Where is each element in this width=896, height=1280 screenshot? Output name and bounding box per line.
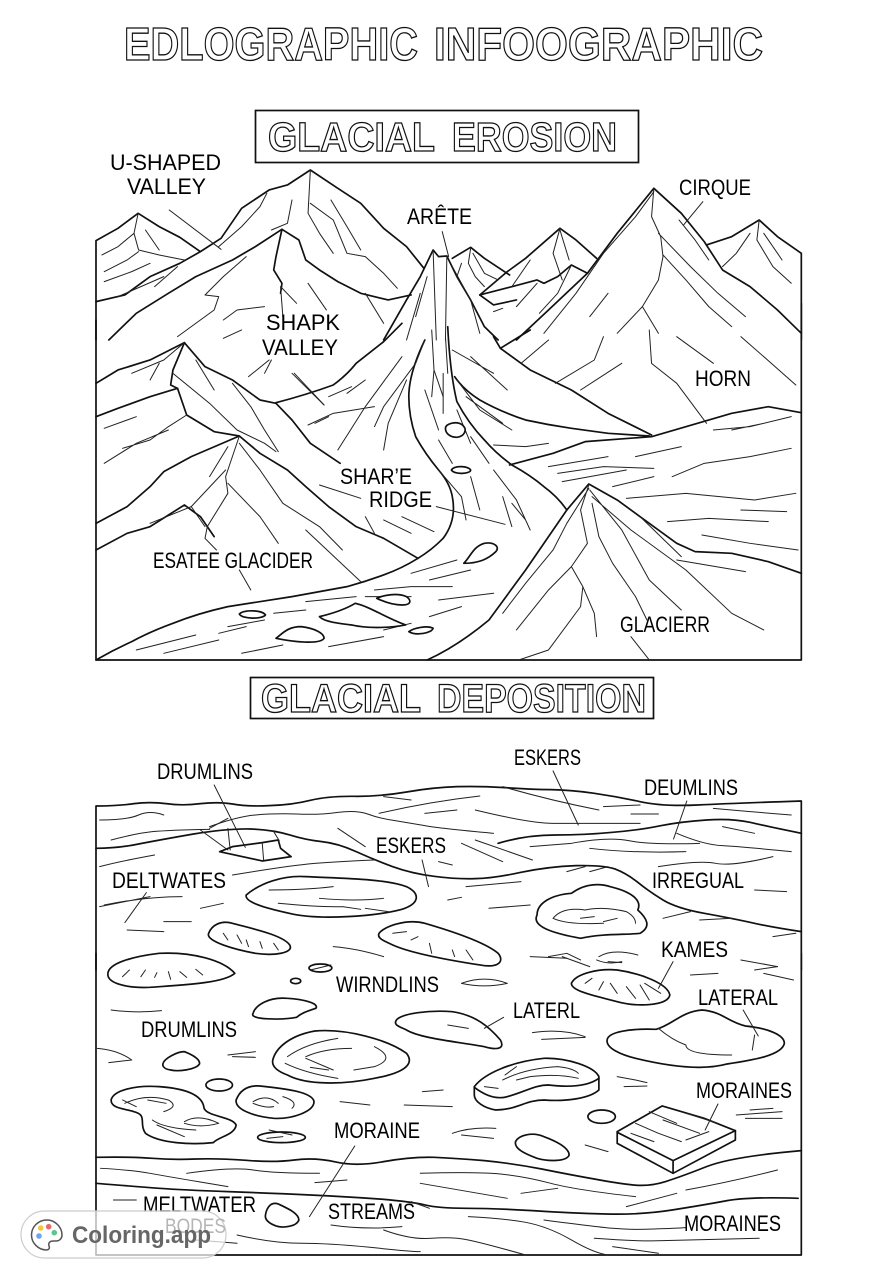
watermark: Coloring.app badge [21,1211,226,1258]
deposition illustration: lower plain and streams [96,953,801,1255]
labels: deposition landforms: DRUMLINS [141,1017,237,1042]
labels: erosion landforms: SHAPK [266,310,340,335]
mountain illustration: glacier valley and foreground [96,303,801,660]
labels: deposition landforms: ESKERS [376,833,446,858]
labels: erosion landforms: HORN [695,366,751,391]
labels: erosion landforms: GLACIERR [620,612,710,637]
labels: deposition landforms: MELTWATER [143,1192,256,1217]
watermark: Coloring.app badge: BODES [165,1215,226,1238]
labels: deposition landforms: MORAINES [684,1211,781,1236]
labels: deposition landforms: MORAINE [334,1118,420,1143]
labels: deposition landforms: MORAINES [696,1078,792,1103]
heading: glacial deposition [250,677,654,721]
labels: deposition landforms: IRREGUAL [652,868,744,893]
labels: deposition landforms: LATERL [513,998,580,1023]
labels: erosion landforms: ESATEE GLACIDER [153,548,313,573]
labels: deposition landforms: STREAMS [328,1199,415,1224]
labels: erosion landforms: ARÊTE [407,204,472,229]
panel: glacial deposition [96,677,801,1255]
labels: deposition landforms: DELTWATES [112,868,226,893]
heading: glacial erosion: GLACIAL [268,114,435,160]
labels: deposition landforms: WIRNDLINS [336,972,439,997]
labels: deposition landforms: ESKERS [514,745,581,770]
labels: deposition landforms: DRUMLINS [157,759,253,784]
heading: glacial deposition: GLACIAL [261,677,421,721]
deposition illustration: upper plain [96,771,801,970]
labels: erosion landforms: CIRQUE [679,175,751,200]
labels: erosion landforms: U-SHAPED [110,150,221,175]
heading: glacial erosion: EROSION [452,114,617,160]
labels: deposition landforms: LATERAL [698,985,778,1010]
labels: erosion landforms: SHAR’E [340,464,412,489]
title: EDLOGRAPHIC [124,18,418,70]
mountain illustration: upper range [96,170,801,340]
labels: deposition landforms: KAMES [661,937,728,962]
watermark text: Coloring.app [72,1222,211,1249]
labels: deposition landforms: DEUMLINS [644,775,738,800]
icon: palette [32,1220,62,1250]
title: INFOOGRAPHIC [434,18,763,70]
heading: glacial deposition: DEPOSITION [437,677,646,721]
labels: erosion landforms: VALLEY [127,174,206,199]
panel: glacial erosion [96,110,801,660]
heading: glacial erosion [256,110,638,162]
title [124,18,763,70]
labels: erosion landforms: VALLEY [262,335,338,360]
labels: erosion landforms [110,150,751,637]
labels: deposition landforms [112,745,792,1236]
labels: erosion landforms: RIDGE [369,487,432,512]
